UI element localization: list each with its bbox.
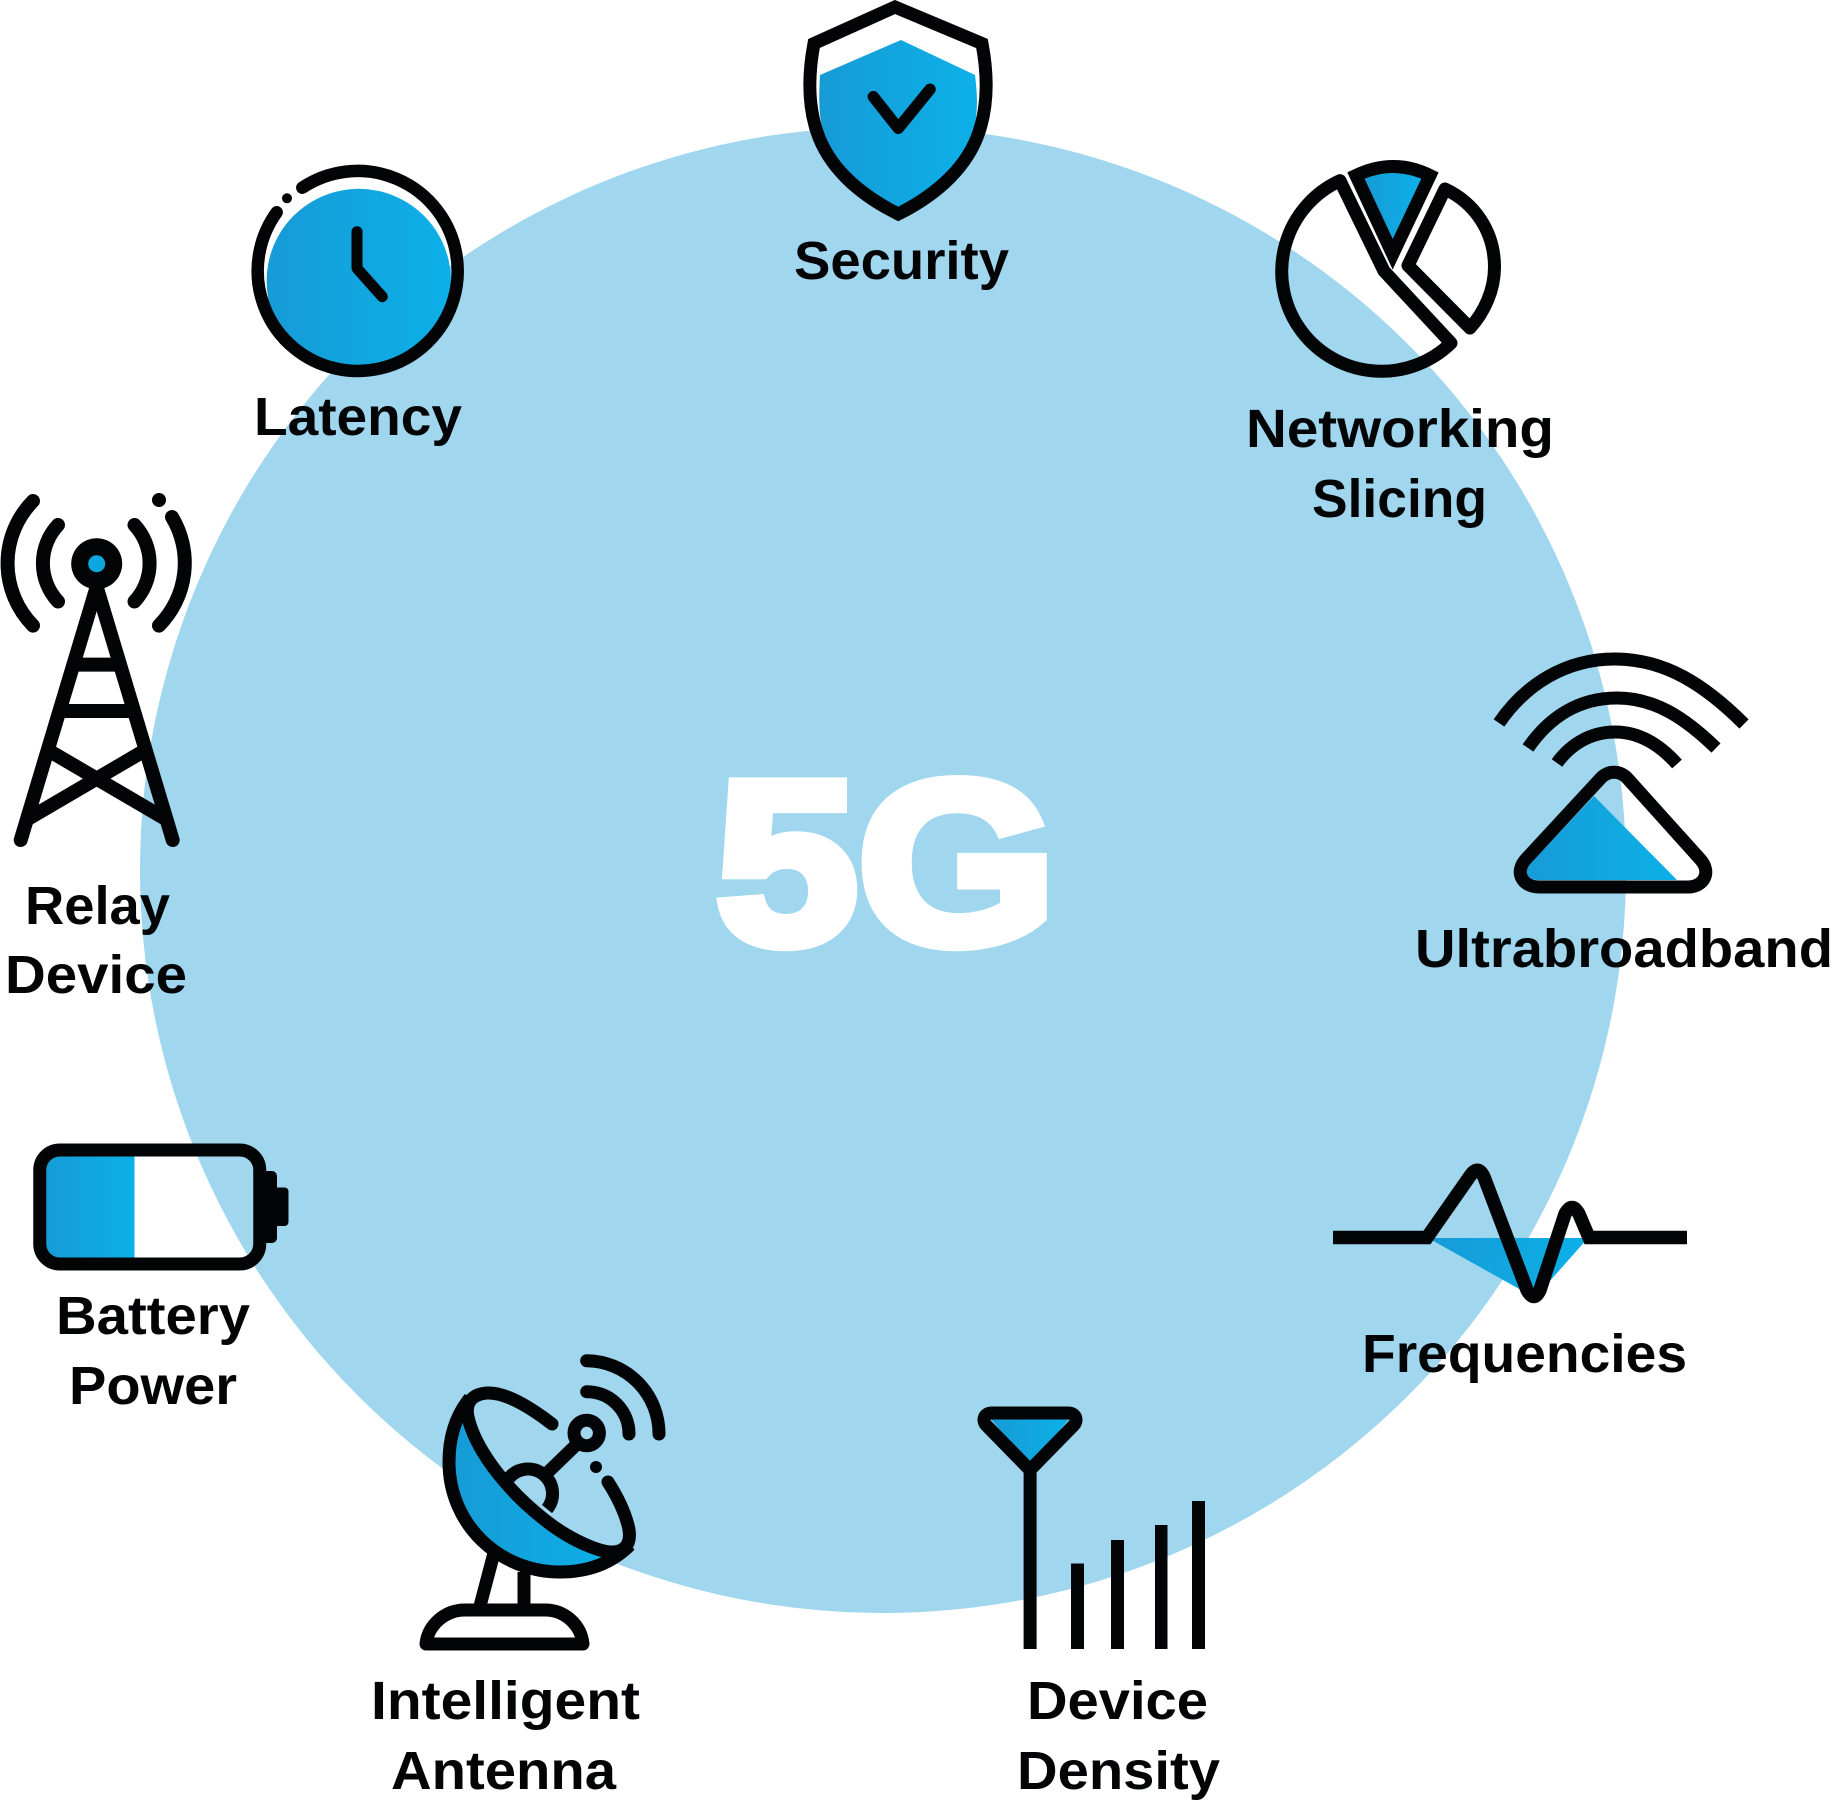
icon: pie chart — [1282, 166, 1494, 371]
label: Security: Security — [794, 231, 1009, 291]
label: Networking Slicing: Slicing — [1312, 469, 1487, 529]
item: battery power — [40, 1150, 288, 1416]
label: Device Density: Device — [1027, 1671, 1208, 1731]
background circle — [140, 127, 1626, 1613]
label: Battery Power: Battery — [56, 1286, 250, 1346]
item: latency — [254, 171, 462, 447]
icon: clock — [258, 171, 458, 373]
label: Frequencies: Frequencies — [1362, 1324, 1687, 1384]
icon: shield with check — [810, 7, 986, 214]
label: Relay Device: Relay — [25, 876, 170, 936]
label: Battery Power: Power — [69, 1356, 237, 1416]
item: intelligent antenna — [371, 1361, 659, 1801]
label: Intelligent Antenna: Intelligent — [371, 1671, 640, 1731]
icon: satellite dish — [426, 1361, 659, 1644]
item: relay device — [5, 493, 187, 1005]
label: Relay Device — [5, 876, 187, 1005]
center title: 5G: 5G — [716, 734, 1056, 993]
item: device density — [984, 1413, 1220, 1801]
label: Intelligent Antenna: Antenna — [391, 1741, 617, 1801]
label: Ultrabroadband: Ultrabroadband — [1415, 919, 1833, 979]
item: networking slicing — [1246, 166, 1554, 529]
label: Battery Power — [56, 1286, 250, 1416]
label: Device Density — [1017, 1671, 1220, 1801]
item: frequencies — [1333, 1170, 1687, 1384]
label: Latency: Latency — [254, 387, 462, 447]
label: Relay Device: Device — [5, 945, 187, 1005]
label: Networking Slicing: Networking — [1246, 399, 1554, 459]
label: Networking Slicing — [1246, 399, 1554, 529]
item: security — [794, 7, 1009, 291]
label: Device Density: Density — [1017, 1741, 1220, 1801]
icon: antenna and bars — [984, 1413, 1205, 1649]
item: ultrabroadband — [1415, 659, 1833, 979]
icon: waveform — [1333, 1170, 1687, 1296]
icon: signal triangle — [1499, 659, 1744, 887]
icon: battery — [40, 1150, 288, 1264]
icon: radio tower — [8, 493, 185, 840]
label: Intelligent Antenna — [371, 1671, 640, 1801]
